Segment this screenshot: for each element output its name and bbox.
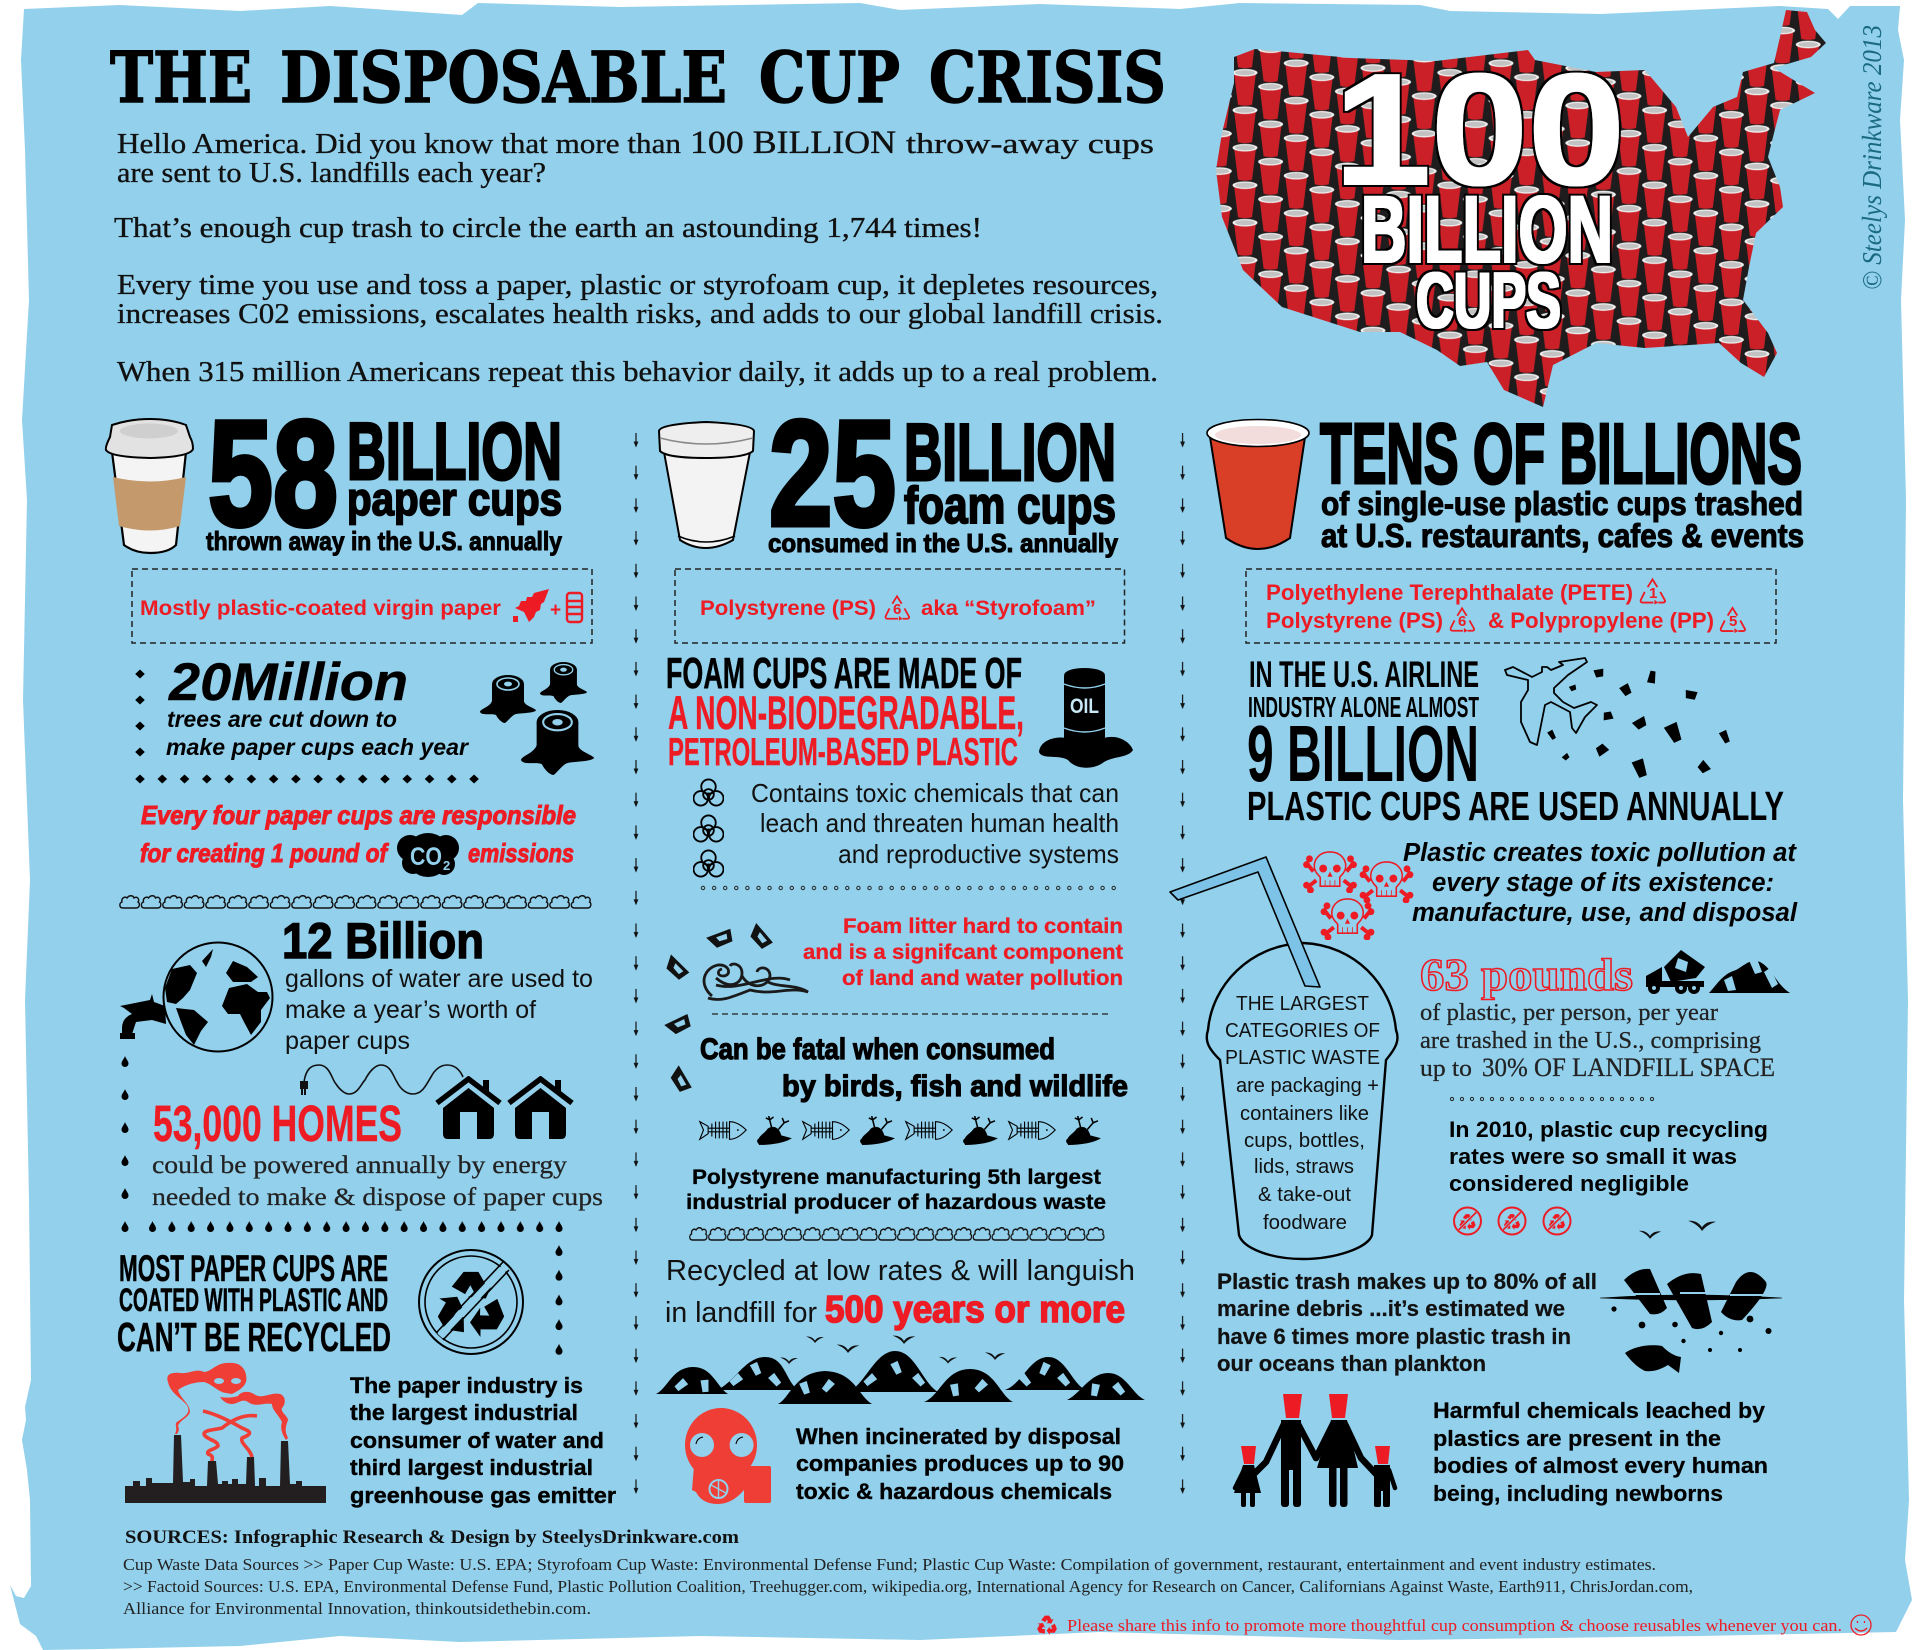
callout: polystyrene: aka “Styrofoam” [921, 596, 1096, 620]
text: marine debris: our oceans than plankton [1217, 1351, 1486, 1376]
text: paper industry [350, 1373, 616, 1508]
intro text block: Hello America. Did you know that more than [117, 129, 681, 160]
icon: red plastic cup [1207, 420, 1309, 549]
sources footer: Alliance for Environmental Innovation, thinkoutsidethebin.com. [123, 1599, 591, 1618]
stat: 12 billion gallons [120, 913, 593, 1055]
US map filled with red cups and 100 billion cups headline [1216, 10, 1826, 407]
text: recycling rates negligible: considered negligible [1449, 1171, 1689, 1196]
stat: 12 billion gallons: 12 Billion [282, 913, 484, 969]
headline: 58 billion paper cups: thrown away in the U.S. annually [206, 526, 562, 556]
headline: 25 billion foam cups [768, 389, 1118, 558]
panel: foam cups [656, 389, 1145, 1504]
icon: dump truck and trash mound [1646, 950, 1790, 994]
arrow column divider right [1178, 433, 1188, 1495]
icon: houses [437, 1079, 572, 1139]
icon: CO2 cloud: CO [410, 843, 442, 871]
sources footer: >> Factoid Sources: U.S. EPA, Environmental Defense Fund, Plastic Pollution Coalition, Treehugger.com, wikipedia.org, International Agency for Research on Cancer, Californians Against Waste, Earth911, ChrisJordan.com, [123, 1577, 1693, 1596]
text: toxic chemicals with biohazard icons [694, 778, 1119, 877]
arrow column divider left [631, 433, 641, 1495]
100: 100 [1334, 42, 1625, 218]
stat: 63 pounds [1420, 949, 1790, 1082]
stat: 53,000 homes: could be powered annually by energy [152, 1152, 568, 1179]
icon: gas mask [685, 1408, 771, 1504]
heading: foam cups are made of: PETROLEUM-BASED PLASTIC [668, 731, 1018, 774]
illustration: to-go cup with text on plastic waste: lids, straws [1254, 1155, 1354, 1178]
icon: foam cup [659, 422, 754, 548]
CUPS: CUPS [1416, 256, 1561, 344]
text: polystyrene manufacturing: industrial producer of hazardous waste [686, 1191, 1106, 1214]
stat: 63 pounds: are trashed in the U.S., comprising [1420, 1028, 1761, 1054]
text: recycling rates negligible: In 2010, plastic cup recycling [1449, 1117, 1768, 1142]
text: paper industry: The paper industry is [350, 1373, 583, 1398]
stat: 63 pounds: 30% OF LANDFILL SPACE [1482, 1053, 1775, 1082]
icon: blowing litter cups and wind swirl [663, 924, 808, 1094]
icon: red barrel [567, 593, 582, 622]
icon: no recycling [419, 1250, 523, 1354]
icon: cups floating in ocean with fish [1600, 1269, 1782, 1373]
text: toxic chemicals with biohazard icons: and reproductive systems [838, 839, 1119, 869]
title: CUP [759, 36, 900, 119]
text: marine debris: Plastic trash makes up to 80% of all [1217, 1269, 1597, 1294]
text: incinerated: companies produces up to 90 [796, 1451, 1124, 1476]
headline: tens of billions: at U.S. restaurants, cafes & events [1321, 517, 1804, 554]
stat: 20 million trees: make paper cups each year [166, 734, 469, 760]
icon: recycle 6 [886, 596, 909, 621]
callout: plastic types: Polyethylene Terephthalate (PETE) [1266, 580, 1633, 605]
callout: material: Mostly plastic-coated virgin paper [140, 596, 502, 620]
text: foam litter: Foam litter hard to contain [843, 915, 1123, 938]
intro text block: are sent to U.S. landfills each year? [117, 158, 546, 189]
icon: family with cup heads [1234, 1394, 1395, 1507]
text: fatal when consumed: by birds, fish and wildlife [782, 1070, 1128, 1103]
heading: foam cups are made of: A NON-BIODEGRADABLE, [668, 686, 1024, 739]
stat: 20 million trees [134, 653, 594, 785]
text: recycled at low rates: 500 years or more [825, 1289, 1125, 1331]
text: recycled at low rates: in landfill for [665, 1297, 817, 1329]
icon: tree stumps [480, 662, 594, 775]
icon: CO2 cloud [397, 833, 459, 877]
icon: smiley [1851, 1615, 1871, 1635]
headline: 58 billion paper cups: BILLION [347, 407, 562, 497]
stat: CO2 emissions: emissions [468, 838, 574, 868]
icon: CO2 cloud: 2 [443, 858, 450, 873]
text: harmful chemicals: plastics are present in the [1433, 1426, 1721, 1451]
callout: plastic types: & Polypropylene (PP) [1488, 608, 1714, 633]
text: harmful chemicals: being, including newborns [1433, 1481, 1723, 1506]
text: polystyrene manufacturing: Polystyrene manufacturing 5th largest [692, 1166, 1101, 1189]
heading: foam cups are made of [666, 649, 1024, 774]
headline: tens of billions: of single-use plastic cups trashed [1321, 485, 1803, 522]
illustration: to-go cup with text on plastic waste: CATEGORIES OF [1225, 1019, 1380, 1042]
text: harmful chemicals: bodies of almost every human [1433, 1453, 1768, 1478]
text: foam litter: of land and water pollution [842, 967, 1123, 990]
stat: 12 billion gallons: gallons of water are used to [285, 965, 593, 993]
icon: recycle 1: 1 [1649, 585, 1657, 602]
heading: foam cups are made of: FOAM CUPS ARE MADE OF [666, 649, 1022, 698]
text: incinerated [796, 1424, 1124, 1504]
stat: 63 pounds: of plastic, per person, per year [1420, 1000, 1718, 1026]
icon: red skulls [1303, 852, 1413, 940]
intro text block: increases C02 emissions, escalates health risks, and adds to our global landfill crisis. [117, 299, 1163, 330]
stat: cannot be recycled [117, 1248, 523, 1360]
headline: 25 billion foam cups: foam cups [904, 477, 1116, 535]
icon: recycle 6 [1451, 608, 1474, 633]
callout: polystyrene [675, 569, 1124, 643]
icon: factory with toxic smoke [125, 1363, 326, 1503]
intro text block: When 315 million Americans repeat this behavior daily, it adds up to a real problem. [117, 357, 1158, 388]
headline: 25 billion foam cups: consumed in the U.S. annually [768, 528, 1118, 558]
text: polystyrene manufacturing [686, 1166, 1106, 1214]
text: marine debris: marine debris ...it’s estimated we [1217, 1296, 1565, 1321]
illustration: to-go cup with text on plastic waste: PLASTIC WASTE [1225, 1046, 1380, 1069]
intro text block [114, 125, 1163, 388]
icon: recycle 5: 5 [1729, 613, 1737, 630]
title: THE [110, 36, 252, 119]
stat: CO2 emissions [140, 800, 576, 877]
icon: paper cup [106, 419, 193, 553]
stat: CO2 emissions: Every four paper cups are responsible [141, 800, 576, 830]
text: recycled at low rates [665, 1255, 1135, 1331]
text: plastic creates toxic pollution: Plastic creates toxic pollution at [1403, 839, 1798, 867]
icon: red tree [515, 589, 549, 622]
illustration: to-go cup with text on plastic waste: THE LARGEST [1236, 992, 1369, 1015]
icon: red recycle [1035, 1616, 1059, 1637]
callout: material: + [550, 600, 561, 621]
stat: 12 billion gallons: make a year’s worth of [285, 996, 536, 1024]
callout: plastic types: Polystyrene (PS) [1266, 608, 1443, 633]
panel: paper cups [106, 389, 616, 1508]
title: DISPOSABLE [280, 36, 727, 119]
text: plastic creates toxic pollution: manufacture, use, and disposal [1412, 899, 1798, 927]
sources footer [123, 1527, 1871, 1637]
illustration: to-go cup with text on plastic waste: cups, bottles, [1244, 1129, 1365, 1152]
stat: 53,000 homes: needed to make & dispose of paper cups [152, 1184, 603, 1211]
stat: 12 billion gallons: paper cups [285, 1027, 410, 1055]
text: plastic creates toxic pollution: every stage of its existence: [1432, 869, 1774, 897]
stat: cannot be recycled: MOST PAPER CUPS ARE [119, 1248, 388, 1289]
illustration: to-go cup with text on plastic waste: foodware [1263, 1211, 1347, 1234]
text: paper industry: greenhouse gas emitter [350, 1483, 616, 1508]
icon: plug and wire [300, 1065, 463, 1095]
headline: 25 billion foam cups: 25 [769, 389, 896, 557]
headline: 25 billion foam cups: BILLION [904, 408, 1116, 498]
text: harmful chemicals [1433, 1398, 1768, 1506]
BILLION: BILLION [1361, 177, 1613, 283]
stat: 63 pounds: up to [1420, 1056, 1472, 1082]
stat: 53,000 homes: 53,000 HOMES [153, 1095, 402, 1152]
headline: tens of billions [1320, 407, 1804, 554]
headline: 58 billion paper cups: paper cups [347, 473, 562, 525]
icon: oil barrel spill: OIL [1070, 695, 1099, 718]
stat: airline 9 billion: 9 BILLION [1247, 709, 1479, 798]
intro text block: throw-away cups [906, 129, 1154, 160]
intro text block: 100 BILLION [690, 125, 896, 161]
text: paper industry: the largest industrial [350, 1400, 578, 1425]
text: incinerated: toxic & hazardous chemicals [796, 1479, 1112, 1504]
text: foam litter: and is a signifcant component [803, 941, 1123, 964]
title [110, 36, 1166, 119]
icon: recycle 6: 6 [893, 601, 901, 618]
text: paper industry: third largest industrial [350, 1455, 593, 1480]
stat: 20 million trees: 20Million [168, 653, 408, 712]
sources footer: Cup Waste Data Sources >> Paper Cup Waste: U.S. EPA; Styrofoam Cup Waste: Environmental Defense Fund; Plastic Cup Waste: Compilation of government, restaurant, entertainment and event industry estimates. [123, 1555, 1656, 1574]
intro text block: Every time you use and toss a paper, plastic or styrofoam cup, it depletes resources, [117, 270, 1158, 301]
text: foam litter [803, 915, 1123, 990]
text: harmful chemicals: Harmful chemicals leached by [1433, 1398, 1765, 1423]
stat: airline 9 billion: IN THE U.S. AIRLINE [1249, 654, 1479, 695]
headline: 58 billion paper cups [206, 389, 562, 557]
stat: airline 9 billion: INDUSTRY ALONE ALMOST [1248, 692, 1479, 724]
stat: airline 9 billion [1247, 654, 1784, 829]
share message: Please share this info to promote more thoughtful cup consumption & choose reusables whenever you can. [1067, 1616, 1842, 1635]
illustration: landfill mounds with birds [656, 1336, 1145, 1404]
panel: plastic cups [1170, 407, 1804, 1507]
callout: material [132, 569, 592, 643]
icon: oil barrel spill [1039, 668, 1133, 768]
icon: recycle 1 [1641, 579, 1665, 605]
text: toxic chemicals with biohazard icons: leach and threaten human health [760, 808, 1119, 838]
icon: recycle 5 [1721, 608, 1745, 633]
text: marine debris [1217, 1269, 1597, 1376]
headline: 58 billion paper cups: 58 [208, 389, 338, 557]
icon: recycle 6: 6 [1458, 613, 1466, 630]
stat: cannot be recycled: COATED WITH PLASTIC AND [119, 1282, 388, 1318]
text: fatal when consumed [700, 1033, 1128, 1103]
illustration: to-go cup with text on plastic waste: containers like [1240, 1102, 1369, 1125]
text: incinerated: When incinerated by disposal [796, 1424, 1121, 1449]
text: marine debris: have 6 times more plastic trash in [1217, 1324, 1571, 1349]
stat: cannot be recycled: CAN’T BE RECYCLED [117, 1314, 391, 1360]
callout: plastic types [1246, 569, 1776, 643]
intro text block: That’s enough cup trash to circle the earth an astounding 1,744 times! [114, 213, 982, 244]
icon row: fish skeletons and dead birds [700, 1116, 1101, 1145]
illustration: to-go cup with text on plastic waste: are packaging + [1236, 1074, 1379, 1097]
stat: CO2 emissions: for creating 1 pound of [140, 838, 389, 868]
text: paper industry: consumer of water and [350, 1428, 604, 1453]
illustration: to-go cup with text on plastic waste [1170, 857, 1398, 1259]
text: recycling rates negligible: rates were so small it was [1449, 1144, 1737, 1169]
text: recycled at low rates: Recycled at low rates & will languish [666, 1255, 1135, 1287]
icon: birds [1639, 1221, 1716, 1239]
text: plastic creates toxic pollution [1303, 839, 1798, 940]
callout: polystyrene: Polystyrene (PS) [700, 596, 876, 620]
icon: globe with faucet [120, 942, 272, 1052]
illustration: to-go cup with text on plastic waste: & take-out [1258, 1183, 1351, 1206]
text: fatal when consumed: Can be fatal when consumed [700, 1033, 1055, 1066]
stat: 20 million trees: trees are cut down to [167, 706, 397, 732]
map of the USA [1216, 10, 1826, 407]
icon: airplane dropping cups [1505, 658, 1731, 779]
text: toxic chemicals with biohazard icons: Contains toxic chemicals that can [751, 778, 1119, 808]
title: CRISIS [929, 36, 1166, 119]
text: recycling rates negligible [1449, 1117, 1768, 1196]
icons: red no recycling [1454, 1208, 1570, 1234]
sources footer: SOURCES: Infographic Research & Design by SteelysDrinkware.com [125, 1527, 739, 1548]
copyright vertical text: © Steelys Drinkware 2013 [1857, 25, 1887, 290]
stat: 53,000 homes [152, 1065, 603, 1211]
stat: 63 pounds: 63 pounds [1420, 949, 1633, 1000]
